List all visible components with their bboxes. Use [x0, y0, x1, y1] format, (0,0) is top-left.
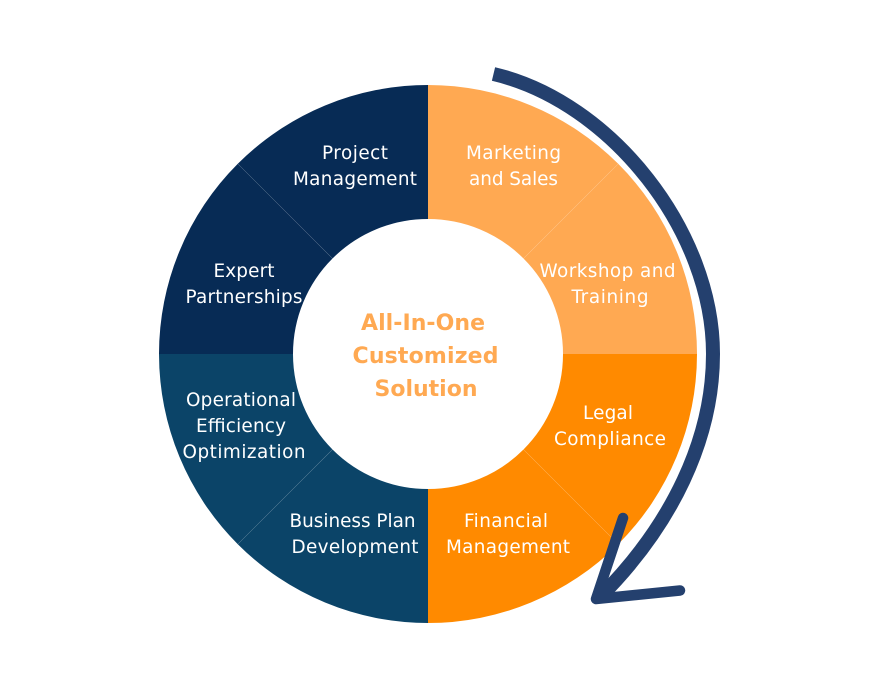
segment: Financial Management: [428, 450, 618, 623]
center title: Solution: [374, 377, 478, 402]
center title: All-In-One: [361, 311, 485, 336]
donut chart: [159, 85, 697, 623]
label: Project Management: Project: [322, 143, 388, 164]
segment: Workshop and Training: [524, 164, 697, 354]
segment: Expert Partnerships: [159, 164, 332, 354]
label: Expert Partnerships: [186, 261, 302, 308]
label: Operational Efficiency Optimization: Operational: [186, 390, 296, 411]
segment: Project Management: [238, 85, 428, 258]
label: Marketing and Sales: and Sales: [469, 169, 558, 190]
label: Marketing and Sales: Marketing: [466, 143, 561, 164]
label: Operational Efficiency Optimization: Optimization: [182, 442, 306, 463]
label: Financial Management: Management: [446, 537, 570, 558]
label: Project Management: Management: [293, 169, 417, 190]
segment: Operational Efficiency Optimization: [159, 354, 332, 544]
label: Workshop and Training: Training: [570, 287, 648, 308]
label: Expert Partnerships: Partnerships: [186, 287, 302, 308]
label: Expert Partnerships: Expert: [214, 261, 274, 282]
center title: [352, 311, 498, 402]
label: Legal Compliance: [554, 403, 666, 450]
label: Business Plan Development: Development: [292, 537, 418, 558]
label: Operational Efficiency Optimization: [182, 390, 306, 463]
label: Financial Management: Financial: [464, 511, 548, 532]
label: Operational Efficiency Optimization: Efficiency: [196, 416, 286, 437]
label: Financial Management: [446, 511, 570, 558]
label: Project Management: [293, 143, 417, 190]
label: Workshop and Training: Workshop and: [540, 261, 676, 282]
label: Workshop and Training: [540, 261, 676, 308]
label: Legal Compliance: Compliance: [554, 429, 666, 450]
label: Business Plan Development: [290, 511, 418, 558]
label: Business Plan Development: Business Plan: [290, 511, 416, 532]
segment: Business Plan Development: [238, 450, 428, 623]
arrow: clockwise direction: [494, 74, 713, 599]
center title: Customized: [352, 344, 498, 369]
segment: Marketing and Sales: [428, 85, 618, 258]
label: Marketing and Sales: [466, 143, 561, 190]
segment: Legal Compliance: [524, 354, 697, 544]
label: Legal Compliance: Legal: [583, 403, 633, 424]
